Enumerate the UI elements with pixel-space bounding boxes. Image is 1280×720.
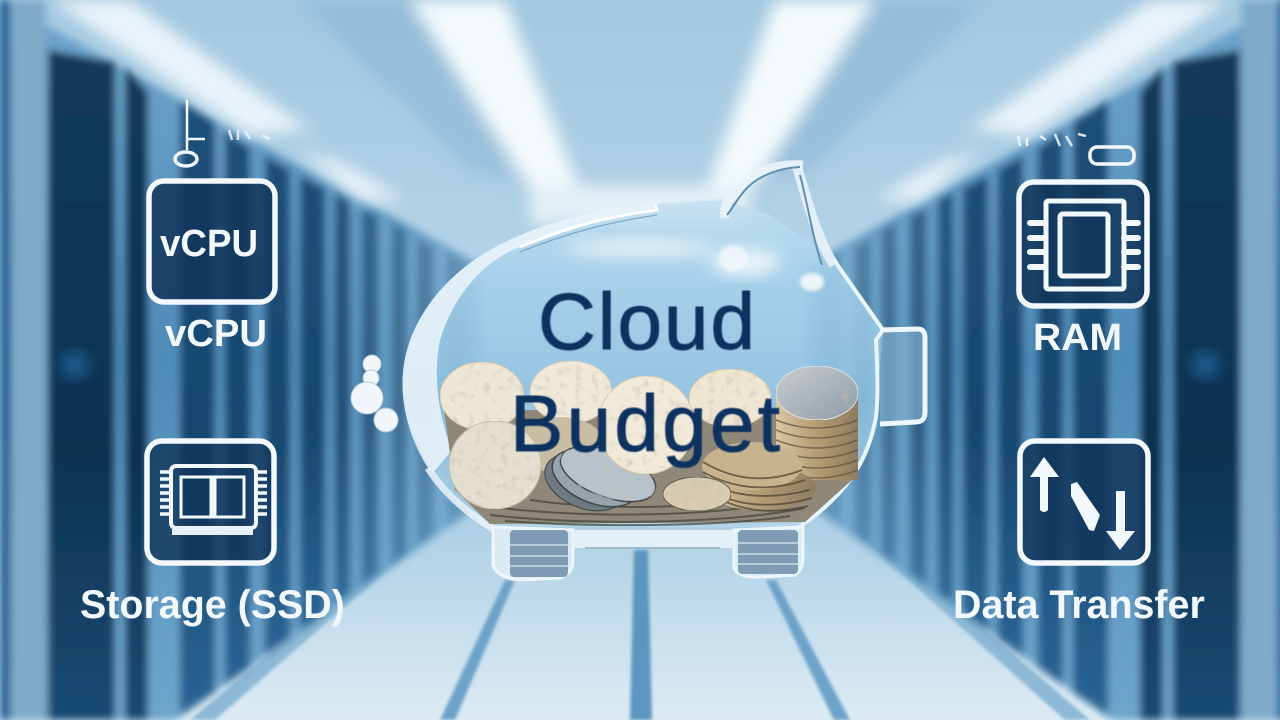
icon: down arrow bbox=[1106, 491, 1135, 550]
ceiling lights bbox=[50, 0, 1230, 225]
piggy body glass bbox=[402, 200, 883, 527]
piggy snout bbox=[880, 329, 925, 424]
server racks left bbox=[0, 0, 482, 720]
heading: Cloud Budget bbox=[510, 277, 780, 468]
piggy legs bbox=[493, 527, 803, 580]
corridor floor bbox=[175, 505, 1105, 720]
interior reflections bbox=[565, 240, 780, 276]
icon: key glitch mark bbox=[175, 100, 270, 166]
coin top centre bbox=[530, 361, 612, 423]
big left coin bbox=[449, 421, 541, 509]
server racks right bbox=[806, 0, 1280, 720]
icon: up arrow bbox=[1030, 457, 1059, 512]
label: vCPU: vCPU bbox=[165, 313, 267, 355]
label: RAM: RAM bbox=[1033, 317, 1122, 359]
icon: RAM box bbox=[1019, 182, 1147, 306]
panel: vCPU bbox=[149, 100, 275, 355]
big centre coin bbox=[598, 376, 694, 474]
piggy lower-left edge bbox=[428, 468, 495, 530]
coin top left bbox=[440, 362, 524, 430]
indicator glows bbox=[62, 352, 1218, 378]
panel: RAM bbox=[1018, 134, 1147, 359]
icon: RAM chip bbox=[1030, 201, 1138, 289]
piggy right edge bbox=[799, 260, 883, 527]
icon: slash bbox=[1071, 482, 1100, 531]
panel: Storage bbox=[80, 441, 345, 627]
heading: Cloud Budget: Budget bbox=[510, 379, 780, 468]
panel: Data Transfer bbox=[953, 441, 1205, 627]
icon: SSD chip bbox=[160, 466, 267, 535]
piggy tail bbox=[351, 355, 398, 432]
piggy ear bbox=[725, 165, 803, 218]
label: Data Transfer: Data Transfer bbox=[953, 583, 1205, 627]
icon: vCPU box bbox=[149, 181, 275, 302]
coin base beige bbox=[663, 477, 731, 511]
heading: Cloud Budget: Cloud bbox=[538, 277, 755, 366]
label: Storage (SSD): Storage (SSD) bbox=[80, 583, 345, 627]
coins bbox=[440, 361, 858, 525]
coin base layers bbox=[444, 410, 858, 524]
icon: SSD box bbox=[147, 441, 274, 563]
piggy rim band bbox=[402, 203, 658, 474]
silver top coin bbox=[776, 366, 858, 420]
coin top right bbox=[689, 369, 771, 427]
gold coin stack right bbox=[776, 395, 858, 480]
icon: transfer box bbox=[1020, 441, 1148, 563]
gold coin stack centre bbox=[704, 466, 816, 510]
icon: connector glitch mark bbox=[1018, 134, 1134, 164]
piggy bank bbox=[351, 165, 925, 580]
icon text: vCPU bbox=[160, 223, 258, 265]
silver tilted coins bbox=[536, 442, 634, 522]
coin mid cream bbox=[515, 417, 605, 473]
